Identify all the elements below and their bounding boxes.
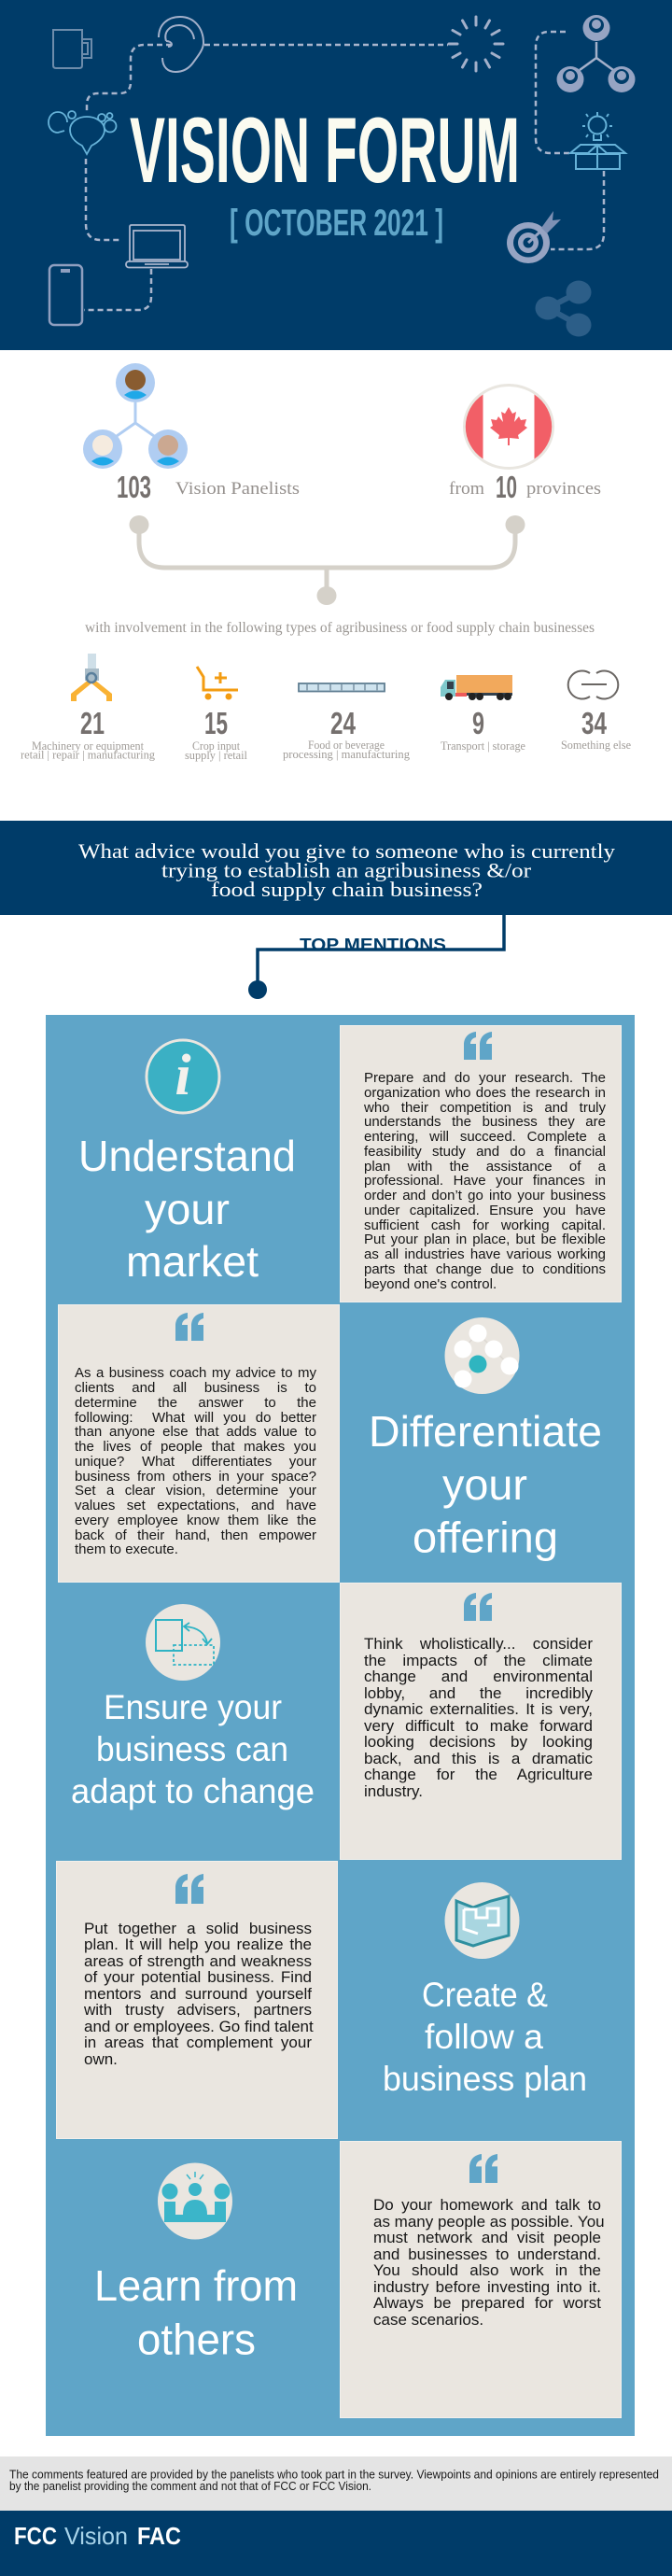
quote text: as all industries have various working (364, 1246, 606, 1262)
quote text: of your potential business. Find (84, 1968, 312, 1986)
quote text: under capitalized. Ensure you have (364, 1203, 606, 1218)
quote mark (469, 2154, 497, 2183)
heading text: Learn from (94, 2261, 298, 2310)
category: crop input: supply | retail (185, 749, 248, 762)
quote text: unique? What differentiates your (75, 1454, 316, 1470)
quote text: parts that change due to conditions (364, 1261, 606, 1277)
heading text (383, 1976, 587, 2098)
quote text: and businesses to understand. (373, 2245, 601, 2263)
quote text (364, 1635, 593, 1800)
involvement caption: with involvement in the following types of agribusiness or food supply chain businesses (85, 620, 595, 636)
disclaimer band (0, 2456, 672, 2511)
category: transport: 9 (472, 706, 484, 740)
top mentions label: TOP MENTIONS (300, 936, 446, 954)
stat: 103 vision panelists: 103 (117, 470, 151, 504)
quote text: dynamic externalities. It is very, (364, 1700, 593, 1718)
quote text: Think wholistically... consider (364, 1635, 593, 1653)
quote text: industry before investing into it. (373, 2278, 601, 2295)
heading text: business can (96, 1730, 288, 1768)
quote text: looking decisions by looking (364, 1733, 593, 1751)
quote text: than anyone else that adds value to (75, 1424, 316, 1440)
disclaimer text: by the panelist providing the comment and not that of FCC or FCC Vision. (9, 2480, 371, 2493)
icon: canadian flag (465, 385, 553, 469)
quote text: change and environmental (364, 1668, 593, 1685)
heading text: your (442, 1460, 527, 1509)
quote text: every employee know them like the (75, 1513, 316, 1528)
category: food or beverage: 24 (330, 706, 356, 740)
quote mark (175, 1874, 203, 1904)
quote text: sufficient cash for working capital. (364, 1218, 606, 1232)
heading: create and follow a business plan (383, 1882, 587, 2098)
quote text: Put together a solid business (84, 1920, 312, 1936)
category: something else: Something else (561, 739, 631, 752)
quote text: must network and visit people (373, 2229, 601, 2246)
bracket connector (129, 515, 525, 605)
quote card: solid business plan (56, 1860, 338, 2139)
quote text: industry. (364, 1782, 423, 1800)
icon: loading burst (449, 17, 503, 71)
icon: ear (159, 17, 203, 72)
heading: understand your market (78, 1038, 296, 1286)
question banner (0, 821, 672, 915)
quote mark (464, 1032, 492, 1060)
quote text (364, 1070, 606, 1292)
stat: 103 vision panelists: Vision Panelists (175, 479, 300, 499)
icon: speech bubbles (49, 111, 116, 154)
quote text: case scenarios. (373, 2310, 483, 2329)
icon: information (147, 1040, 219, 1113)
header banner (0, 0, 672, 350)
quote text: plan with the assistance of a (364, 1158, 606, 1175)
quote text: Set a clear vision, determine your (75, 1483, 316, 1499)
heading text: Understand (78, 1132, 296, 1180)
quote text: back of their hand, then empower (75, 1527, 316, 1543)
quote text (373, 2196, 605, 2329)
quote text: very difficult to make forward (364, 1717, 593, 1735)
category: transport: Transport | storage (441, 739, 525, 753)
quote card: prepare and research (340, 1025, 622, 1302)
quote text: back, and this is a dramatic (364, 1750, 593, 1767)
quote mark (464, 1593, 492, 1621)
icon: light bulb in box (570, 112, 625, 169)
quote text: Do your homework and talk to (373, 2196, 601, 2214)
heading text: others (137, 2316, 256, 2364)
quote text: the impacts of the climate (364, 1652, 593, 1669)
footer logo text (14, 2522, 181, 2550)
quote text: the lives of people that makes you (75, 1439, 316, 1455)
footer logo text: Vision (64, 2522, 128, 2550)
quote text: change for the Agriculture (364, 1766, 593, 1783)
quote text: You should also work in the (373, 2261, 601, 2279)
heading text: follow a (425, 2018, 543, 2056)
category: transport (441, 675, 525, 753)
quote card: business coach (58, 1304, 340, 1583)
stat: from 10 provinces: from (449, 479, 484, 499)
footer band (0, 2511, 672, 2576)
quote text: business from others in your space? (75, 1469, 316, 1485)
quote text: understands the business they are (364, 1114, 606, 1130)
heading: ensure your business can adapt to change (71, 1604, 315, 1810)
quote text: order and don’t go into your business (364, 1188, 606, 1204)
quote text: following: What will you do better (75, 1410, 316, 1426)
top mentions label and connector (248, 915, 506, 999)
quote text: As a business coach my advice to my (75, 1365, 316, 1381)
icon: people network (556, 15, 635, 92)
quote text: own. (84, 2050, 118, 2067)
heading text: Create & (422, 1976, 548, 2014)
category: machinery: 21 (80, 706, 105, 740)
quote text: beyond one's control. (364, 1275, 497, 1292)
quote text (84, 1920, 314, 2067)
category: something else (561, 670, 631, 752)
quote text: values set expectations, and have (75, 1498, 316, 1513)
category: food or beverage: processing | manufacturing (283, 748, 411, 761)
icon: people meeting (158, 2162, 232, 2239)
heading text: your (145, 1185, 230, 1233)
heading text (71, 1688, 315, 1810)
heading text: Differentiate (369, 1407, 602, 1456)
stat: 103 vision panelists (117, 470, 300, 504)
quote text: areas of strength and weakness (84, 1951, 312, 1970)
icon: smartphone (49, 265, 82, 325)
category: food or beverage (283, 683, 411, 761)
footer logo text: FAC (137, 2522, 181, 2550)
quote text: determine the answer to the (75, 1395, 316, 1411)
heading text: market (126, 1237, 259, 1286)
icon: panelist network (83, 363, 188, 469)
quote mark (175, 1313, 203, 1341)
stat: from 10 provinces: provinces (526, 479, 601, 499)
quote text: Put your plan in place, but be flexible (364, 1232, 606, 1247)
quote text: Prepare and do your research. The (364, 1070, 606, 1086)
category: machinery: retail | repair | manufacturing (21, 749, 156, 762)
question text: What advice would you give to someone who is currently (78, 839, 615, 863)
heading text (369, 1407, 602, 1561)
category: food or beverage: Food or beverage (308, 739, 385, 752)
connector line and dot (248, 915, 504, 999)
heading: learn from others (94, 2162, 298, 2364)
stat: from 10 provinces (449, 470, 601, 504)
quote text: plan. It will help you realize the (84, 1936, 312, 1953)
panelists and provinces section (21, 363, 631, 762)
stat: from 10 provinces: 10 (496, 470, 517, 504)
disclaimer text: The comments featured are provided by the panelists who took part in the survey. Viewpoints and opinions are entirely represented (9, 2469, 659, 2482)
icon: information: i (175, 1044, 191, 1107)
category: something else: 34 (581, 706, 607, 740)
quote text: as many people as possible. You (373, 2213, 605, 2230)
icon: laptop (126, 225, 188, 267)
icon: differentiate nodes (444, 1317, 519, 1394)
quote card: do your homework (340, 2141, 622, 2418)
question text (78, 839, 615, 901)
advice panel (46, 1015, 635, 2436)
category: crop input: 15 (204, 706, 228, 740)
heading text: adapt to change (71, 1772, 315, 1810)
quote text: entering, will succeed. Complete a (364, 1129, 606, 1145)
heading text: business plan (383, 2060, 587, 2098)
quote text: them to execute. (75, 1541, 178, 1557)
heading text (94, 2261, 298, 2364)
icon: map (444, 1882, 519, 1959)
heading text (78, 1132, 296, 1286)
heading: differentiate your offering (369, 1317, 602, 1561)
heading text: offering (413, 1513, 558, 1561)
category: crop input: Crop input (192, 739, 240, 753)
question text: food supply chain business? (211, 878, 483, 901)
quote text: feasibility study and do a financial (364, 1144, 606, 1160)
disclaimer text (9, 2469, 659, 2493)
quote text: Always be prepared for worst (373, 2294, 601, 2312)
quote text: organization who does the research in (364, 1085, 606, 1101)
quote text: with trusty advisers, partners (84, 2001, 312, 2019)
quote text: lobby, and the incredibly (364, 1684, 593, 1702)
footer logo text: FCC (14, 2522, 57, 2550)
category: machinery (21, 654, 156, 762)
quote card: think wholistically (340, 1583, 622, 1860)
icon: target and arrow (507, 211, 561, 263)
quote text: in areas that complement your (84, 2034, 312, 2051)
category: machinery: Machinery or equipment (32, 739, 145, 753)
question text: trying to establish an agribusiness &/or (161, 859, 532, 881)
quote text (75, 1365, 316, 1557)
icon: share (536, 280, 592, 336)
quote text: professional. Have your finances in (364, 1173, 606, 1189)
icon: mug (53, 30, 91, 68)
quote text: and or employees. Go find talent (84, 2017, 314, 2035)
dashed connectors (84, 32, 604, 310)
quote text: mentors and surround yourself (84, 1985, 312, 2002)
heading text: Ensure your (104, 1688, 282, 1726)
quote text: who their competition is and truly (364, 1100, 606, 1115)
date subtitle: [ OCTOBER 2021 ] (230, 203, 443, 244)
icon: adapt (146, 1604, 220, 1681)
category: crop input (185, 667, 248, 762)
quote text: clients and all business is to (75, 1380, 316, 1396)
